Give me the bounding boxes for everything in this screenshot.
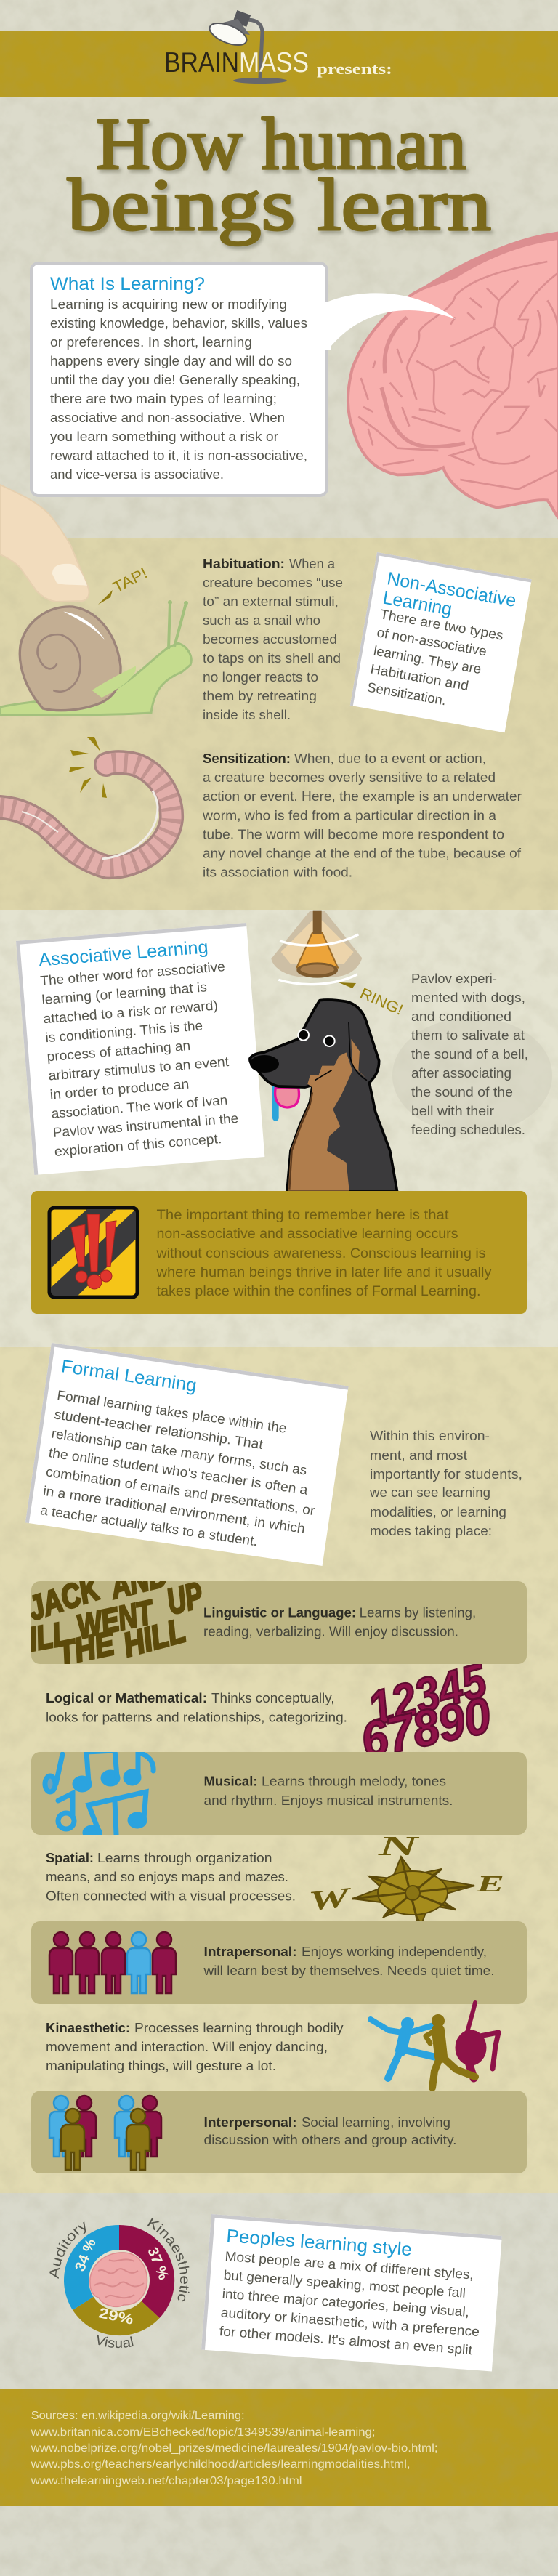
text: intrapersonal: will learn best by themselves. Needs quiet time. <box>203 1963 494 1978</box>
text block: sources: www.thelearningweb.net/chapter03/page130.html <box>31 2475 302 2487</box>
heading: non-associative <box>381 568 518 631</box>
panel: associative background <box>0 910 558 1347</box>
icon: music notes <box>45 1751 153 1838</box>
icon: numbers: 12345 <box>362 1652 493 1736</box>
text block: non-associative: Sensitization. <box>366 679 448 708</box>
text: spatial <box>46 1850 296 1904</box>
panel: linguistic row <box>31 1581 527 1664</box>
text block: non-associative: There are two types <box>379 606 505 643</box>
panel: musical row <box>31 1751 527 1838</box>
icon: compass <box>311 1837 503 1921</box>
text: intrapersonal <box>203 1944 494 1978</box>
text block: associative learning <box>40 958 240 1159</box>
text: spatial: Often connected with a visual processes. <box>46 1888 296 1904</box>
text block: associative learning: arbitrary stimulus to an event <box>48 1054 230 1083</box>
text block: habituation <box>203 556 343 722</box>
icon: desk lamp <box>206 10 287 84</box>
text block: associative learning: learning (or learning that is <box>41 979 208 1007</box>
text block: sensitization <box>202 751 522 879</box>
panel: intrapersonal row <box>31 1921 527 2004</box>
title <box>68 103 491 246</box>
panel: what is learning <box>31 263 456 496</box>
icon: worm <box>0 762 171 867</box>
text block: what is learning: reward attached to it, it is non-associative, <box>50 448 307 463</box>
text block: what is learning: there are two main types of learning; <box>50 391 277 406</box>
text: logical: Logical or Mathematical: <box>46 1690 207 1705</box>
icon: jack and jill lettering: AND <box>106 1555 171 1606</box>
logo wordmark: MASS <box>239 47 309 78</box>
text block: what is learning: and vice-versa is associative. <box>50 467 224 482</box>
text block: sources <box>31 2410 438 2487</box>
text block: habituation: Habituation: <box>203 556 285 571</box>
heading: associative learning: Associative Learning <box>38 937 209 971</box>
text block: sensitization: a creature becomes overly sensitive to a related <box>203 770 496 785</box>
text block: sensitization: tube. The worm will become more respondent to <box>203 827 504 841</box>
icon: jack and jill lettering: HILL <box>119 1611 190 1664</box>
text block: sensitization: When, due to a event or action, <box>294 751 486 766</box>
text block: pavlov: the sound of the <box>411 1084 513 1099</box>
text block: sources: www.britannica.com/EBchecked/topic/1349539/animal-learning; <box>31 2426 376 2439</box>
dog nose <box>250 1055 279 1073</box>
text block: habituation: such as a snail who <box>203 613 320 628</box>
value: 34%: 34 % <box>72 2237 100 2274</box>
heading: peoples learning style: Peoples learning style <box>226 2226 413 2260</box>
text block: within this environment: Within this environ- <box>370 1428 490 1443</box>
panel: peoples learning style card <box>201 2214 502 2372</box>
icon: snail <box>0 600 191 715</box>
icon: numbers <box>363 1664 490 1752</box>
text: interpersonal <box>203 2115 456 2147</box>
text block: sensitization: its association with food. <box>203 865 352 879</box>
text block: associative learning: is conditioning. This is the <box>45 1017 203 1045</box>
logo wordmark <box>164 47 309 78</box>
text block: habituation: no longer reacts to <box>203 669 318 685</box>
text block: habituation: becomes accustomed <box>203 631 337 647</box>
text block: pavlov: the sound of a bell, <box>411 1046 528 1062</box>
panel: non-associative learning card <box>350 552 532 732</box>
panel: callout important <box>31 1191 527 1314</box>
text: intrapersonal: Intrapersonal: <box>203 1944 296 1959</box>
text block: associative learning: in order to produce an <box>49 1076 190 1102</box>
icon: numbers: 67890 <box>356 1687 496 1769</box>
text block: sensitization: worm, who is fed from a particular direction in a <box>202 808 497 823</box>
text block: what is learning: or preferences. In short, learning <box>50 334 252 350</box>
heading: non-associative: Non-Associative <box>386 568 518 611</box>
text: linguistic: Learns by listening, <box>360 1604 476 1620</box>
text block: pavlov: after associating <box>411 1065 512 1081</box>
crimson dancer <box>456 2003 498 2078</box>
text: spatial: Learns through organization <box>97 1850 272 1865</box>
logo wordmark: BRAIN <box>164 47 239 78</box>
dog drool <box>266 1085 285 1118</box>
text: kinaesthetic: Kinaesthetic: <box>46 2020 130 2035</box>
value: 29%: 29% <box>97 2305 135 2328</box>
text block: sensitization: Sensitization: <box>203 751 291 766</box>
title: beings learn <box>68 164 491 246</box>
logo <box>164 10 392 84</box>
snail body <box>0 643 191 715</box>
label: ring <box>339 982 405 1019</box>
icon: jack and jill lettering: THE <box>54 1623 118 1673</box>
text block: formal learning: Formal learning takes place within the <box>56 1387 288 1436</box>
icon: five people <box>49 1932 176 1993</box>
text block: sources: www.pbs.org/teachers/earlychildhood/articles/learningmodalities.html, <box>31 2458 411 2471</box>
panel: formal learning card <box>25 1343 349 1566</box>
text block: what is learning: until the day you die! Generally speaking, <box>50 372 300 387</box>
text block: within this environment <box>369 1428 522 1538</box>
wedge: kinaesthetic <box>119 2225 174 2318</box>
title: How human <box>96 103 466 185</box>
text block: habituation: to” an external stimuli, <box>203 594 339 609</box>
snail shell <box>20 607 136 711</box>
text block: callout: without conscious awareness. Conscious learning is <box>155 1246 485 1261</box>
text block: callout <box>155 1208 492 1299</box>
text block: pavlov <box>411 971 528 1137</box>
text: linguistic: reading, verbalizing. Will enjoy discussion. <box>203 1623 458 1639</box>
text block: what is learning: associative and non-associative. When <box>50 410 285 425</box>
text block: what is learning <box>50 296 307 482</box>
mini brain <box>90 2253 147 2306</box>
footer band <box>0 2389 558 2506</box>
text block: non-associative: of non-associative <box>376 624 488 659</box>
text block: within this environment: ment, and most <box>370 1448 467 1463</box>
heading: what is learning: What Is Learning? <box>50 274 205 294</box>
decorative ghost shape <box>392 1017 552 1134</box>
text block: what is learning: happens every single day and will do so <box>50 353 292 368</box>
text: musical <box>203 1773 453 1808</box>
panel: learning style background <box>0 2193 558 2576</box>
blue dancer <box>371 2018 436 2078</box>
dog tongue <box>275 1088 299 1107</box>
brain illustration <box>348 233 558 517</box>
text block: callout: non-associative and associative learning occurs <box>157 1227 458 1242</box>
text: interpersonal: Social learning, involving <box>302 2115 450 2130</box>
text block: associative learning: Pavlov was instrumental in the <box>52 1110 239 1140</box>
text block: habituation: creature becomes “use <box>203 575 343 590</box>
text block: formal learning: student-teacher relationship. That <box>53 1406 264 1452</box>
text block: peoples learning style: for other models. It's almost an even split <box>219 2323 473 2357</box>
header band <box>0 31 558 97</box>
icon: jack and jill lettering: WENT <box>73 1592 158 1646</box>
text block: pavlov: bell with their <box>411 1103 494 1118</box>
text block: associative learning: exploration of this concept. <box>54 1131 222 1159</box>
text: musical: and rhythm. Enjoys musical instruments. <box>203 1793 453 1808</box>
text block: pavlov: feeding schedules. <box>411 1122 525 1137</box>
text block: formal learning <box>39 1387 327 1556</box>
panel: top background <box>0 0 558 538</box>
label: tap <box>98 565 150 605</box>
presents label: presents: <box>317 60 392 78</box>
text: kinaesthetic: manipulating things, will gesture a lot. <box>46 2058 276 2073</box>
text block: formal learning: in a more traditional environment, in which <box>42 1483 306 1536</box>
text block: sources: www.nobelprize.org/nobel_prizes/medicine/laureates/1904/pavlov-bio.html; <box>31 2442 438 2455</box>
text block: callout: takes place within the confines of Formal Learning. <box>157 1284 481 1299</box>
icon: people groups <box>49 2096 161 2170</box>
text block: habituation: to taps on its shell and <box>203 650 341 666</box>
text block: peoples learning style: auditory or kinaesthetic, with a preference <box>220 2304 480 2339</box>
text: kinaesthetic: Processes learning through bodily <box>134 2020 344 2035</box>
text block: within this environment: modes taking place: <box>370 1523 492 1538</box>
compass letters: E <box>475 1870 504 1897</box>
panel: interpersonal row <box>31 2091 527 2173</box>
icon: dancers <box>371 2003 498 2088</box>
text block: pavlov: them to salivate at <box>411 1027 525 1043</box>
dog eyes <box>298 1030 335 1046</box>
panel: associative learning card <box>16 923 264 1175</box>
text block: sensitization: any novel change at the end of the tube, because of <box>203 846 522 860</box>
dog brown markings <box>288 1052 352 1191</box>
text block: within this environment: we can see learning <box>369 1485 490 1500</box>
label: kinaesthetic: Kinaesthetic <box>147 2218 190 2302</box>
text: kinaesthetic: movement and interaction. Will enjoy dancing, <box>46 2039 328 2054</box>
text: logical: Thinks conceptually, <box>211 1690 334 1705</box>
gold runner <box>426 2015 475 2088</box>
text: linguistic: Linguistic or Language: <box>203 1604 356 1620</box>
speech tail <box>326 293 456 350</box>
text block: formal learning: combination of emails and presentations, or <box>45 1463 316 1518</box>
text block: what is learning: Learning is acquiring new or modifying <box>50 296 287 312</box>
text block: non-associative <box>366 606 505 716</box>
text block: sources: Sources: en.wikipedia.org/wiki/Learning; <box>31 2410 245 2422</box>
label: tap: TAP! <box>110 565 150 596</box>
text: intrapersonal: Enjoys working independently, <box>302 1944 487 1959</box>
text: interpersonal: discussion with others and group activity. <box>203 2132 456 2147</box>
text block: within this environment: modalities, or learning <box>370 1504 506 1519</box>
text block: pavlov: mented with dogs, <box>411 990 525 1005</box>
text: logical <box>46 1690 347 1725</box>
text block: what is learning: existing knowledge, behavior, skills, values <box>50 315 307 331</box>
text: spatial: Spatial: <box>46 1850 94 1865</box>
icon: jack and jill lettering: JACK <box>23 1568 105 1628</box>
text block: peoples learning style: into three major categories, being visual, <box>222 2286 470 2319</box>
speech box <box>31 263 327 496</box>
wedge: visual <box>73 2280 160 2335</box>
icon: finger <box>0 485 89 602</box>
compass letters <box>307 1831 504 1917</box>
icon: ringing bell <box>271 911 362 985</box>
icon: dog <box>250 1000 397 1192</box>
icon: jack and jill lettering: ILL <box>26 1614 72 1658</box>
text block: formal learning: the online student who's teacher is often a <box>48 1445 310 1498</box>
label: visual: Visual <box>97 2334 134 2349</box>
panel: formal learning background <box>0 1347 558 2193</box>
text block: peoples learning style: Most people are a mix of different styles, <box>225 2248 474 2282</box>
text block: formal learning: relationship can take many forms, such as <box>51 1426 308 1478</box>
text: musical: Learns through melody, tones <box>262 1773 446 1789</box>
compass letters: W <box>307 1882 355 1917</box>
label: auditory: Auditory <box>49 2221 86 2279</box>
panel: non-associative background <box>0 538 558 910</box>
text: kinaesthetic <box>46 2020 344 2073</box>
text block: associative learning: The other word for associative <box>40 958 225 988</box>
heading: formal learning: Formal Learning <box>60 1356 198 1396</box>
text block: pavlov: and conditioned <box>411 1009 512 1024</box>
text block: pavlov: Pavlov experi- <box>411 971 497 986</box>
text block: formal learning: a teacher actually talks to a student. <box>39 1502 259 1549</box>
text block: habituation: When a <box>289 556 336 571</box>
text: linguistic <box>203 1604 476 1639</box>
text: interpersonal: Interpersonal: <box>203 2115 296 2130</box>
text block: associative learning: process of attaching an <box>46 1038 191 1064</box>
text block: non-associative: learning. They are <box>373 642 482 677</box>
text: spatial: means, and so enjoys maps and mazes. <box>46 1869 288 1884</box>
compass letters: N <box>377 1831 420 1862</box>
icon: warning sign <box>49 1208 137 1297</box>
text block: callout: where human beings thrive in later life and it usually <box>155 1265 492 1280</box>
text block: what is learning: you learn something without a risk or <box>50 429 278 444</box>
wedge: auditory <box>64 2225 119 2310</box>
text block: sensitization: action or event. Here, the example is an underwater <box>203 788 522 804</box>
chart: learning style donut <box>49 2218 190 2349</box>
text block: within this environment: importantly for students, <box>370 1466 522 1482</box>
value: 37%: 37 % <box>144 2245 171 2282</box>
icon: jack and jill lettering: UP <box>163 1575 207 1623</box>
text block: habituation: them by retreating <box>203 688 317 703</box>
dog body <box>250 1000 397 1192</box>
text block: peoples learning style <box>219 2248 485 2358</box>
label: ring: RING! <box>357 985 405 1019</box>
icon: worm alert marks <box>69 737 107 798</box>
snail antennae <box>169 603 186 649</box>
icon: jack and jill lettering <box>31 1581 202 1664</box>
text block: associative learning: association. The work of Ivan <box>51 1092 228 1121</box>
text block: callout: The important thing to remember here is that <box>157 1208 449 1223</box>
heading: non-associative: Learning <box>381 588 453 620</box>
text: logical: looks for patterns and relationships, categorizing. <box>46 1709 347 1725</box>
text block: associative learning: attached to a risk or reward) <box>43 997 219 1026</box>
text block: habituation: inside its shell. <box>203 707 291 722</box>
text block: peoples learning style: but generally speaking, most people fall <box>223 2267 466 2301</box>
text block: non-associative: Habituation and <box>369 661 470 693</box>
text: musical: Musical: <box>203 1773 257 1789</box>
